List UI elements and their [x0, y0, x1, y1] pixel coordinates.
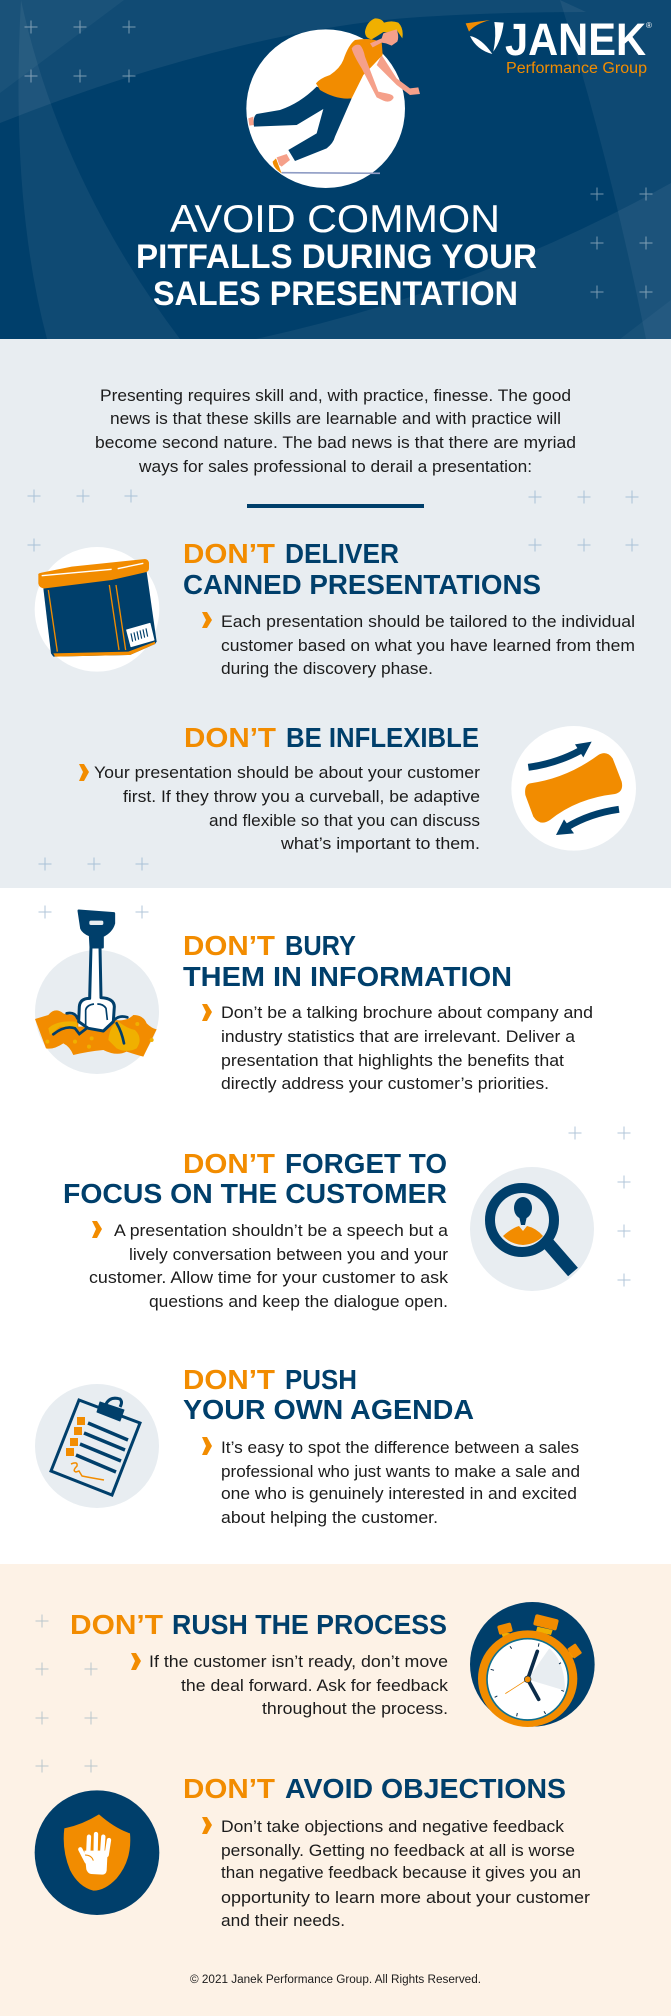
icon: canned presentation tin — [35, 547, 159, 672]
logo: Janek Performance Group: Performance Group — [506, 60, 647, 77]
body text: industry statistics that are irrelevant. Deliver a — [221, 1027, 576, 1046]
body text: the deal forward. Ask for feedback — [181, 1676, 449, 1695]
body text: than negative feedback because it gives you an — [221, 1863, 581, 1882]
panel: white middle section — [0, 888, 671, 1564]
body text: throughout the process. — [262, 1699, 448, 1718]
heading: FORGET TO — [285, 1148, 447, 1179]
section: don't forget to focus on the customer — [63, 1148, 594, 1311]
body text — [89, 1221, 449, 1311]
icon: chevron — [202, 1437, 212, 1455]
icon: shield with hand — [35, 1790, 159, 1915]
illustration: stumbling woman in circle — [246, 18, 420, 188]
heading: PUSH — [285, 1364, 357, 1395]
icon: chevron — [79, 764, 89, 781]
title: SALES PRESENTATION — [153, 275, 518, 313]
heading: DON’T — [183, 538, 275, 569]
body text: about helping the customer. — [221, 1508, 438, 1527]
body text — [221, 612, 635, 678]
heading: FOCUS ON THE CUSTOMER — [63, 1178, 447, 1209]
heading: DON’T — [184, 722, 276, 753]
body text — [94, 763, 480, 853]
icon: stopwatch — [470, 1602, 595, 1727]
heading: DELIVER — [285, 538, 399, 569]
heading: AVOID OBJECTIONS — [285, 1773, 566, 1804]
body text: presentation that highlights the benefits that — [221, 1051, 564, 1070]
heading: YOUR OWN AGENDA — [183, 1394, 474, 1425]
icon: clipboard — [35, 1384, 159, 1508]
heading: DON’T — [183, 930, 275, 961]
body text — [221, 1003, 593, 1093]
heading: DON’T — [183, 1773, 275, 1804]
icon: chevron — [202, 612, 212, 628]
logo: Janek Performance Group — [466, 14, 652, 77]
body text: Your presentation should be about your customer — [94, 763, 480, 782]
heading: DON’T — [183, 1148, 275, 1179]
panel: grey intro section — [0, 339, 671, 888]
heading — [183, 930, 512, 992]
section: don't bury them in information — [183, 930, 593, 1093]
intro text: become second nature. The bad news is that there are myriad — [95, 433, 576, 452]
body text — [221, 1817, 590, 1930]
body text: Each presentation should be tailored to the individual — [221, 612, 635, 631]
icon: chevron — [202, 1004, 212, 1021]
section: don't avoid objections — [35, 1773, 590, 1930]
title: PITFALLS DURING YOUR — [136, 238, 537, 276]
heading — [63, 1148, 447, 1209]
icon: flexible shape with arrows — [511, 726, 636, 851]
body text: first. If they throw you a curveball, be adaptive — [123, 787, 480, 806]
heading: THEM IN INFORMATION — [183, 961, 512, 992]
heading: BURY — [285, 930, 356, 961]
icon: shovel in dirt — [35, 911, 159, 1074]
section: don't push your own agenda — [35, 1364, 580, 1527]
body text: during the discovery phase. — [221, 659, 433, 678]
title: AVOID COMMON — [170, 198, 500, 241]
heading: BE INFLEXIBLE — [286, 722, 479, 753]
body text: customer. Allow time for your customer to ask — [89, 1268, 449, 1287]
title — [136, 198, 537, 313]
body text: If the customer isn’t ready, don’t move — [149, 1652, 448, 1671]
heading: DON’T — [70, 1609, 163, 1640]
panel: header — [0, 0, 671, 339]
footer: © 2021 Janek Performance Group. All Rights Reserved. — [190, 1974, 481, 1986]
logo: Janek Performance Group: ® — [646, 21, 652, 30]
section: don't rush the process — [70, 1602, 595, 1727]
icon: chevron — [202, 1817, 212, 1834]
heading: RUSH THE PROCESS — [172, 1609, 447, 1640]
body text: customer based on what you have learned from them — [221, 636, 635, 655]
body text: professional who just wants to make a sale and — [221, 1462, 580, 1481]
icon: chevron — [131, 1653, 141, 1670]
body text: lively conversation between you and your — [129, 1245, 448, 1264]
body text: personally. Getting no feedback at all is worse — [221, 1841, 575, 1860]
body text: Don’t take objections and negative feedback — [221, 1817, 565, 1836]
section: don't be inflexible — [79, 722, 636, 853]
body text: opportunity to learn more about your customer — [221, 1888, 590, 1907]
icon: magnifier over customer — [470, 1167, 594, 1291]
body text: and their needs. — [221, 1911, 345, 1930]
body text — [149, 1652, 449, 1718]
body text: and flexible so that you can discuss — [209, 811, 480, 830]
intro text: news is that these skills are learnable and with practice will — [110, 409, 561, 428]
body text: It’s easy to spot the difference between a sales — [221, 1438, 579, 1457]
body text — [221, 1438, 580, 1527]
heading — [183, 538, 541, 600]
body text: what’s important to them. — [280, 834, 480, 853]
body text: one who is genuinely interested in and excited — [221, 1484, 577, 1503]
heading: CANNED PRESENTATIONS — [183, 569, 541, 600]
divider — [247, 504, 424, 508]
intro text: Presenting requires skill and, with practice, finesse. The good — [100, 386, 571, 405]
heading — [183, 1364, 474, 1425]
body text: Don’t be a talking brochure about company and — [221, 1003, 593, 1022]
heading: DON’T — [183, 1364, 275, 1395]
body text: questions and keep the dialogue open. — [149, 1292, 448, 1311]
body text: A presentation shouldn’t be a speech but a — [114, 1221, 449, 1240]
section: don't deliver canned presentations — [183, 538, 635, 678]
icon: chevron — [92, 1221, 102, 1238]
logo: Janek Performance Group: JANEK — [505, 14, 646, 65]
panel: cream bottom section — [0, 1564, 671, 2016]
intro text — [95, 386, 576, 476]
intro text: ways for sales professional to derail a presentation: — [138, 457, 532, 476]
body text: directly address your customer’s priorities. — [221, 1074, 549, 1093]
heading — [184, 722, 479, 753]
